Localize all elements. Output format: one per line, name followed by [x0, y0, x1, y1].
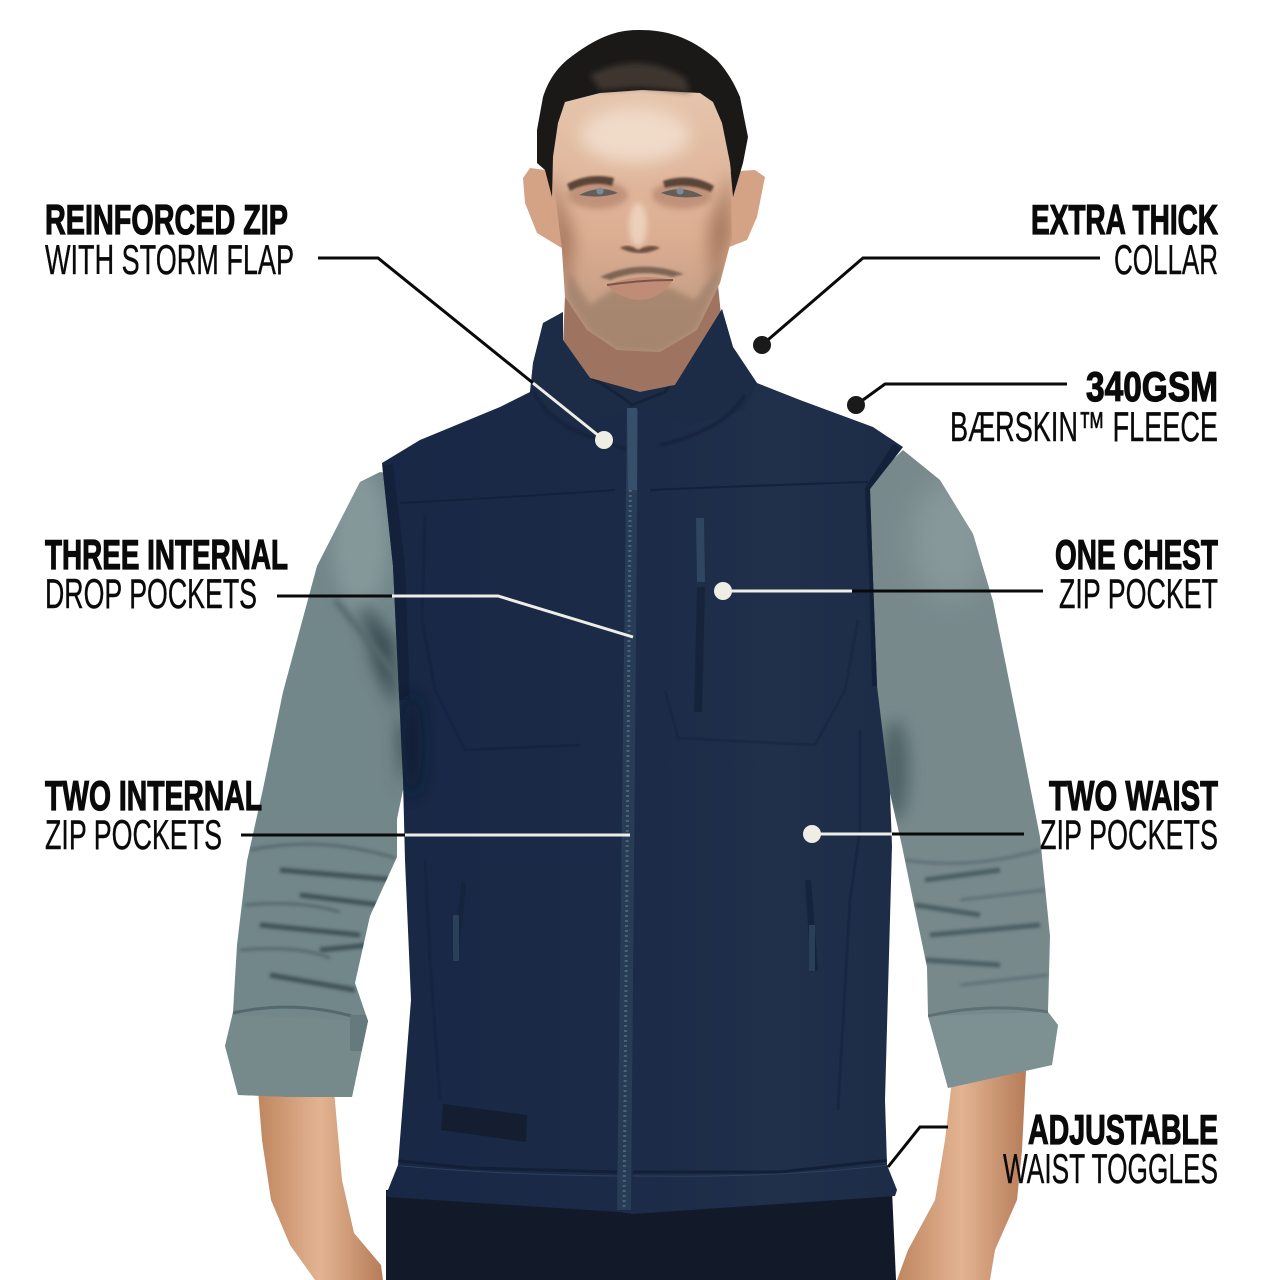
trousers [386, 1190, 896, 1280]
label: reinforced zip: WITH STORM FLAP [45, 236, 294, 283]
callout: two internal zip pockets [45, 772, 630, 858]
leader line: reinforced zip [318, 258, 613, 449]
nose [629, 203, 647, 247]
leader line: toggles [888, 1127, 948, 1167]
callout: extra thick collar [753, 196, 1218, 354]
left sleeve [225, 472, 404, 1097]
callout: three internal drop pockets [45, 531, 633, 637]
label: drop pockets: DROP POCKETS [45, 570, 257, 617]
label: chest pocket [1055, 531, 1218, 617]
label: collar [1031, 196, 1218, 283]
label: drop pockets: THREE INTERNAL [45, 531, 288, 578]
callout: one chest zip pocket [714, 531, 1218, 617]
label: internal zip pockets: ZIP POCKETS [45, 811, 222, 858]
drop pocket outline [422, 515, 580, 750]
yoke seams [400, 482, 868, 503]
side seams [838, 909, 851, 1110]
callout: two waist zip pockets [803, 772, 1218, 858]
underarm shadow [402, 695, 422, 795]
leader line: waist pockets [803, 825, 1024, 843]
leader line: drop pockets [277, 596, 633, 637]
collar zip pull [627, 408, 637, 490]
face [552, 90, 732, 352]
label: fleece: 340GSM [1086, 363, 1218, 410]
label: fleece [950, 363, 1218, 450]
leader line: internal zip pockets [241, 834, 630, 836]
ears [523, 168, 765, 250]
callout: 340gsm fleece [847, 363, 1218, 450]
label: drop pockets [45, 531, 288, 617]
logo patch [441, 1104, 527, 1142]
armhole trim [385, 448, 900, 700]
right waist zip [805, 880, 818, 972]
mouth [607, 277, 673, 300]
label: internal zip pockets: TWO INTERNAL [45, 772, 262, 819]
leader line: fleece [847, 384, 1067, 414]
eye sockets [568, 181, 628, 209]
left forearm [258, 1090, 383, 1280]
label: reinforced zip: REINFORCED ZIP [45, 196, 288, 243]
cheek shadows [554, 176, 732, 287]
callout: adjustable waist toggles [888, 1106, 1218, 1192]
hem [390, 1160, 890, 1172]
label: waist pockets [1040, 772, 1218, 858]
label: collar: COLLAR [1114, 236, 1218, 283]
callout: reinforced zip [45, 196, 613, 449]
leader line: chest pocket [714, 582, 1043, 600]
centre zip [617, 410, 638, 1210]
right sleeve [870, 450, 1058, 1088]
moustache [600, 267, 684, 280]
forehead highlight [580, 107, 690, 163]
brows [567, 176, 714, 192]
eyes [579, 189, 703, 197]
left waist zip [452, 880, 466, 962]
stubble [566, 262, 722, 352]
chest pocket outline [665, 620, 858, 745]
neck [563, 285, 722, 400]
right forearm [897, 1070, 1026, 1280]
label: reinforced zip [45, 196, 294, 283]
vest body [380, 300, 910, 1220]
man wearing the fleece vest [220, 30, 1065, 1280]
collar [530, 309, 757, 392]
leader line: collar [753, 258, 1100, 354]
chest zip [694, 518, 705, 712]
label: internal zip pockets [45, 772, 262, 858]
hair [537, 30, 748, 197]
label: toggles [1003, 1106, 1218, 1192]
